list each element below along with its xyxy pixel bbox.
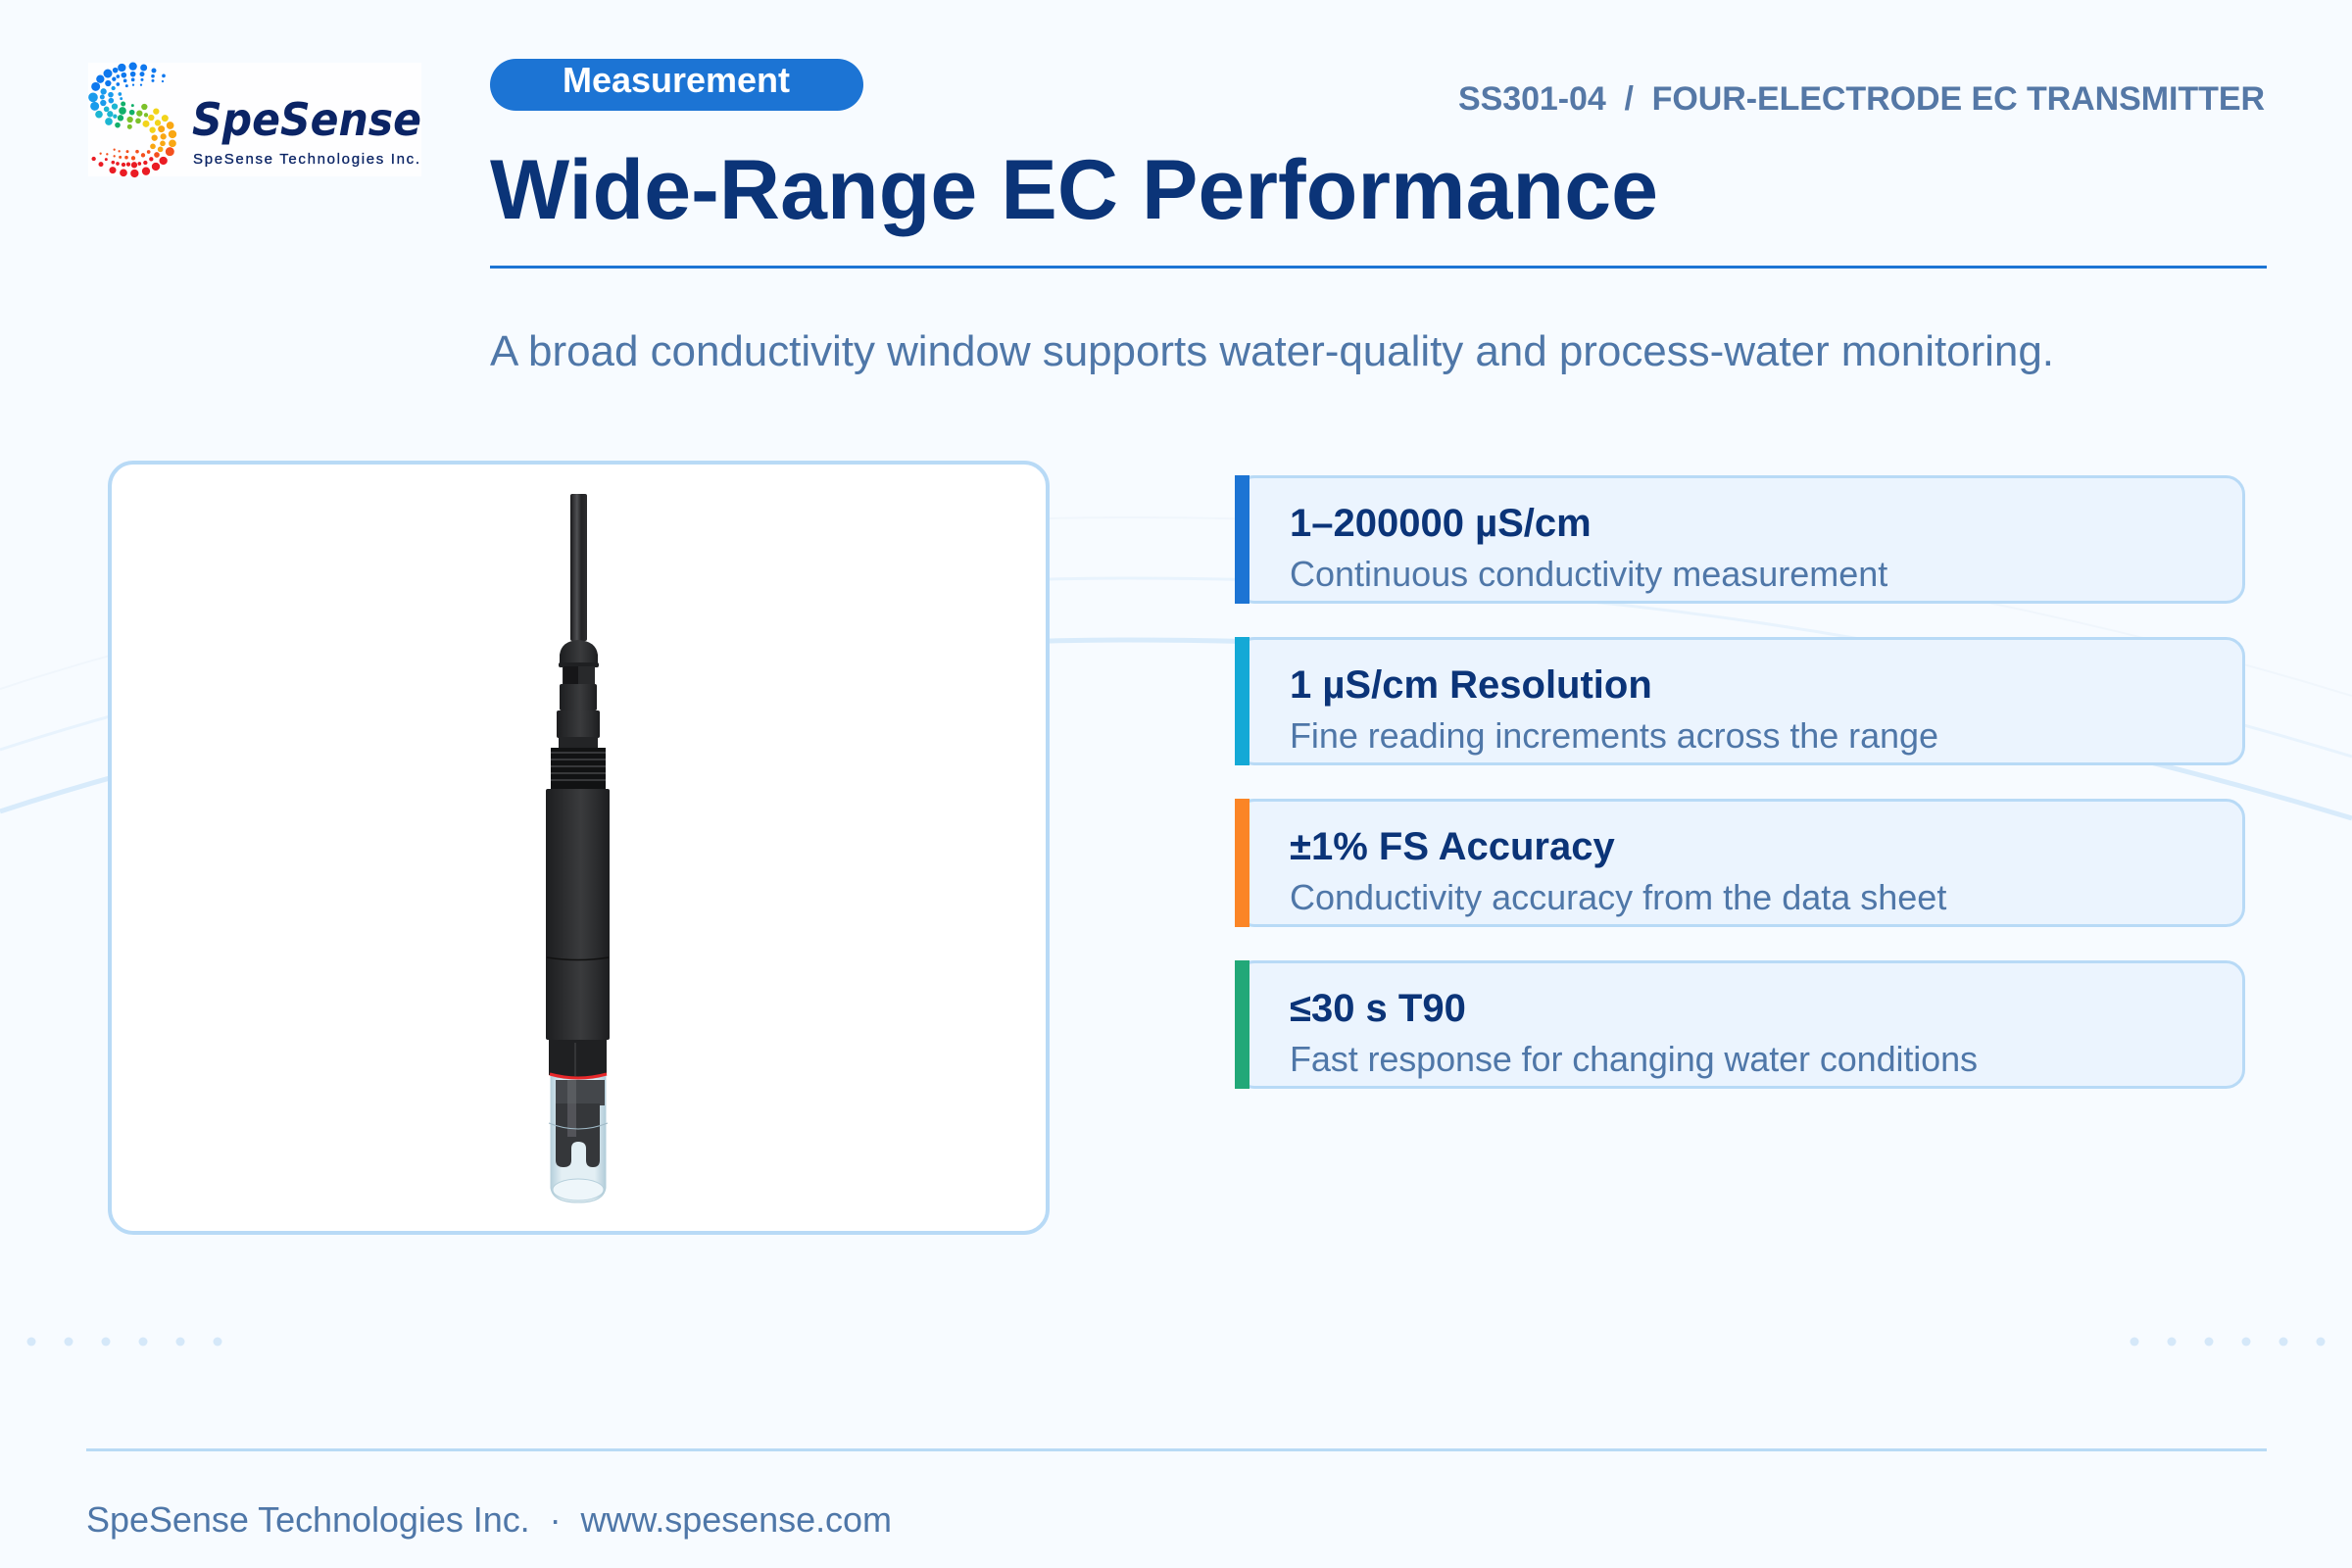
- card: response time: Fast response for changing water conditions: [1290, 1039, 1978, 1079]
- card: resolution: 1 µS/cm Resolution: [1290, 663, 1652, 707]
- logo wordmark: SpeSense: [192, 93, 421, 146]
- footer text: SpeSense Technologies Inc. · www.spesense.com: [86, 1499, 892, 1540]
- category pill: Measurement: Measurement: [563, 60, 790, 100]
- card: range: 1–200000 µS/cm: [1290, 502, 1592, 545]
- cable: [570, 494, 587, 641]
- lower hex nut: [549, 1040, 607, 1078]
- inner electrode assembly: [556, 1103, 600, 1167]
- panel: product image: [110, 463, 1048, 1233]
- title rule: [490, 266, 2267, 269]
- title: Wide-Range EC Performance: [490, 143, 1658, 237]
- card: resolution: Fine reading increments across the range: [1290, 715, 1938, 756]
- logo tagline: SpeSense Technologies Inc.: [193, 151, 419, 168]
- subtitle: A broad conductivity window supports water-quality and process-water monitoring.: [490, 327, 2054, 375]
- inner threaded section: [556, 1080, 605, 1105]
- glass base: [553, 1179, 604, 1200]
- card: response time: ≤30 s T90: [1290, 987, 1466, 1030]
- cable gland: [560, 640, 598, 666]
- icon: rainbow dotted S swirl: [89, 63, 176, 177]
- logo: SpeSense: [88, 63, 421, 177]
- glass sleeve step: [549, 1123, 608, 1129]
- glass guard: [551, 1076, 606, 1202]
- card: response time: [1235, 960, 2244, 1089]
- card: accuracy: [1235, 799, 2244, 927]
- red seal ring: [550, 1074, 607, 1078]
- card: range: [1235, 475, 2244, 604]
- product code label: SS301-04 / FOUR-ELECTRODE EC TRANSMITTER: [1458, 80, 2265, 118]
- card: accuracy: Conductivity accuracy from the data sheet: [1290, 877, 1946, 917]
- card: accuracy: ±1% FS Accuracy: [1290, 825, 1615, 868]
- category pill: Measurement: [490, 59, 863, 111]
- threaded neck: [551, 748, 606, 789]
- icon: four-electrode EC sensor probe: [546, 494, 610, 1202]
- main body: [546, 789, 610, 1040]
- card: range: Continuous conductivity measurement: [1290, 554, 1887, 594]
- card: resolution: [1235, 637, 2244, 765]
